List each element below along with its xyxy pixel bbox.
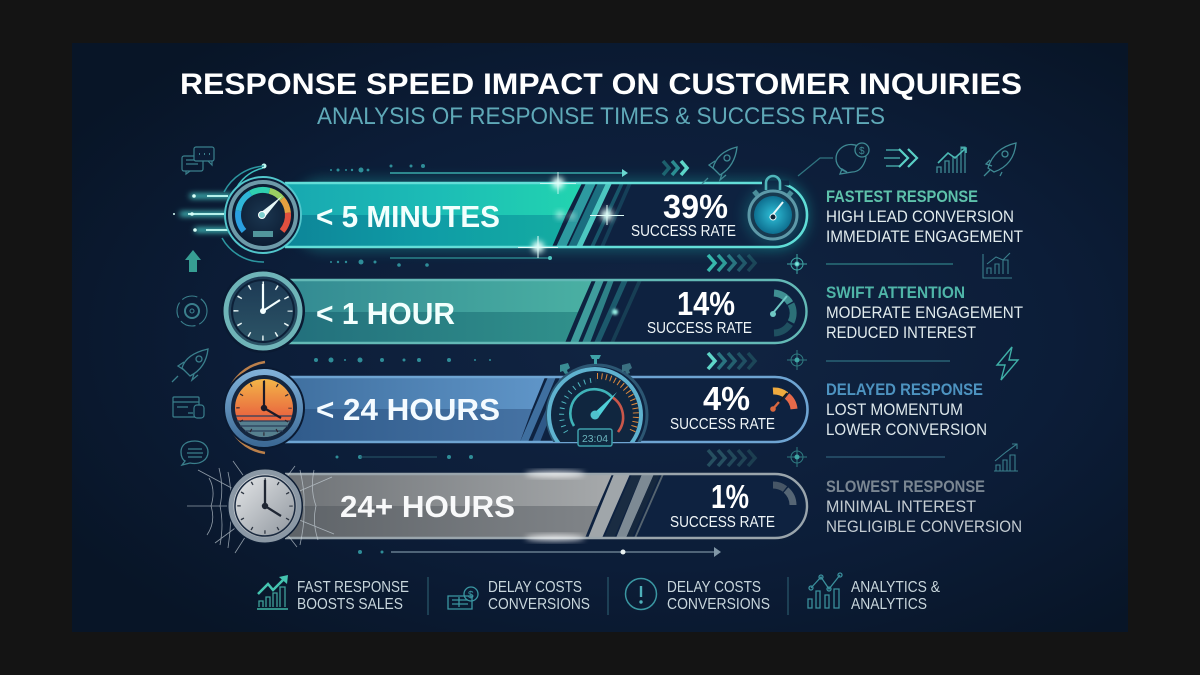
icon: browser window	[173, 397, 204, 418]
icon: gear	[177, 296, 207, 326]
row 4 time label: 24+ HOURS	[340, 489, 515, 524]
main panel	[72, 43, 1128, 632]
row 2 bar: under 1 hour	[285, 280, 807, 343]
block 2: swift attention: MODERATE ENGAGEMENT	[826, 304, 1023, 322]
block 1: fastest response: HIGH LEAD CONVERSION	[826, 208, 1014, 226]
icon: chat bubbles	[182, 147, 214, 174]
footer item 3	[626, 578, 770, 613]
block 3: delayed response: LOST MOMENTUM	[826, 401, 963, 419]
footer item 1: BOOSTS SALES	[297, 596, 403, 613]
row 1 percent: 39%	[663, 188, 728, 225]
icon: lightning bolt	[997, 347, 1018, 380]
footer item 1	[257, 575, 409, 613]
icon: sunset clock	[223, 362, 305, 453]
icon: crosshair targets	[787, 254, 807, 467]
row 4 percent: 1%	[711, 478, 749, 515]
row 4 caption: SUCCESS RATE	[670, 514, 775, 531]
footer item 4: ANALYTICS &	[851, 579, 941, 596]
block 1: fastest response: IMMEDIATE ENGAGEMENT	[826, 228, 1023, 246]
row 4 bar: over 24 hours	[285, 471, 807, 541]
row 3 caption: SUCCESS RATE	[670, 416, 775, 433]
icon group: top right: $	[859, 146, 865, 157]
icon group: top right	[798, 143, 1016, 176]
icon: stopwatch	[743, 176, 803, 245]
icon: chat lines	[181, 441, 208, 465]
icon: small chart row 1	[983, 253, 1012, 278]
block 4: slowest response	[826, 478, 1022, 536]
footer item 3: DELAY COSTS	[667, 579, 761, 596]
icon: mini gauge grey	[773, 485, 793, 505]
footer item 3: CONVERSIONS	[667, 596, 770, 613]
icon: mini gauge teal	[770, 293, 793, 333]
footer item 2: DELAY COSTS	[488, 579, 582, 596]
block 2: swift attention: SWIFT ATTENTION	[826, 284, 965, 302]
block 4: slowest response: MINIMAL INTEREST	[826, 498, 976, 516]
block 1: fastest response	[826, 188, 1023, 246]
block 2: swift attention: REDUCED INTEREST	[826, 324, 976, 342]
row 1 caption: SUCCESS RATE	[631, 223, 736, 240]
row 2 time label: < 1 HOUR	[316, 296, 455, 331]
block 3: delayed response: DELAYED RESPONSE	[826, 381, 983, 399]
title: RESPONSE SPEED IMPACT ON CUSTOMER INQUIRIES	[180, 68, 1022, 101]
block 4: slowest response: SLOWEST RESPONSE	[826, 478, 985, 496]
block 1: fastest response: FASTEST RESPONSE	[826, 188, 978, 206]
icon: large dashboard gauge	[546, 355, 648, 447]
flow lines and dots	[314, 164, 721, 557]
block 3: delayed response: LOWER CONVERSION	[826, 421, 987, 439]
row 1 time label: < 5 MINUTES	[316, 199, 500, 234]
icon: clock with spider web	[187, 461, 334, 553]
row 3 time label: < 24 HOURS	[316, 392, 500, 427]
row 2 caption: SUCCESS RATE	[647, 320, 752, 337]
icon: rocket top	[702, 147, 737, 184]
row 3 percent: 4%	[703, 380, 750, 417]
footer item 4	[808, 573, 941, 613]
row 1 bar: under 5 minutes	[285, 172, 810, 258]
footer item 2: $	[468, 590, 474, 601]
icon: clock 1 hour	[221, 269, 305, 353]
footer item 1: FAST RESPONSE	[297, 579, 409, 596]
icon: rocket left	[172, 349, 208, 382]
block 3: delayed response	[826, 381, 987, 439]
block 4: slowest response: NEGLIGIBLE CONVERSION	[826, 518, 1022, 536]
icon: up arrow	[185, 250, 201, 272]
icon: mini gauge orange	[770, 391, 794, 412]
subtitle: ANALYSIS OF RESPONSE TIMES & SUCCESS RATES	[317, 103, 885, 130]
block 2: swift attention	[826, 284, 1023, 342]
row 2 percent: 14%	[677, 285, 735, 322]
icon: large dashboard gauge: 23:04	[582, 433, 608, 445]
footer item 2: CONVERSIONS	[488, 596, 590, 613]
icon: speedometer clock	[173, 164, 301, 262]
footer item 2	[448, 579, 590, 613]
row 3 bar: under 24 hours	[285, 377, 808, 442]
chevrons: flow markers	[663, 161, 755, 466]
footer item 4: ANALYTICS	[851, 596, 927, 613]
icon: small chart row 3	[994, 444, 1018, 471]
